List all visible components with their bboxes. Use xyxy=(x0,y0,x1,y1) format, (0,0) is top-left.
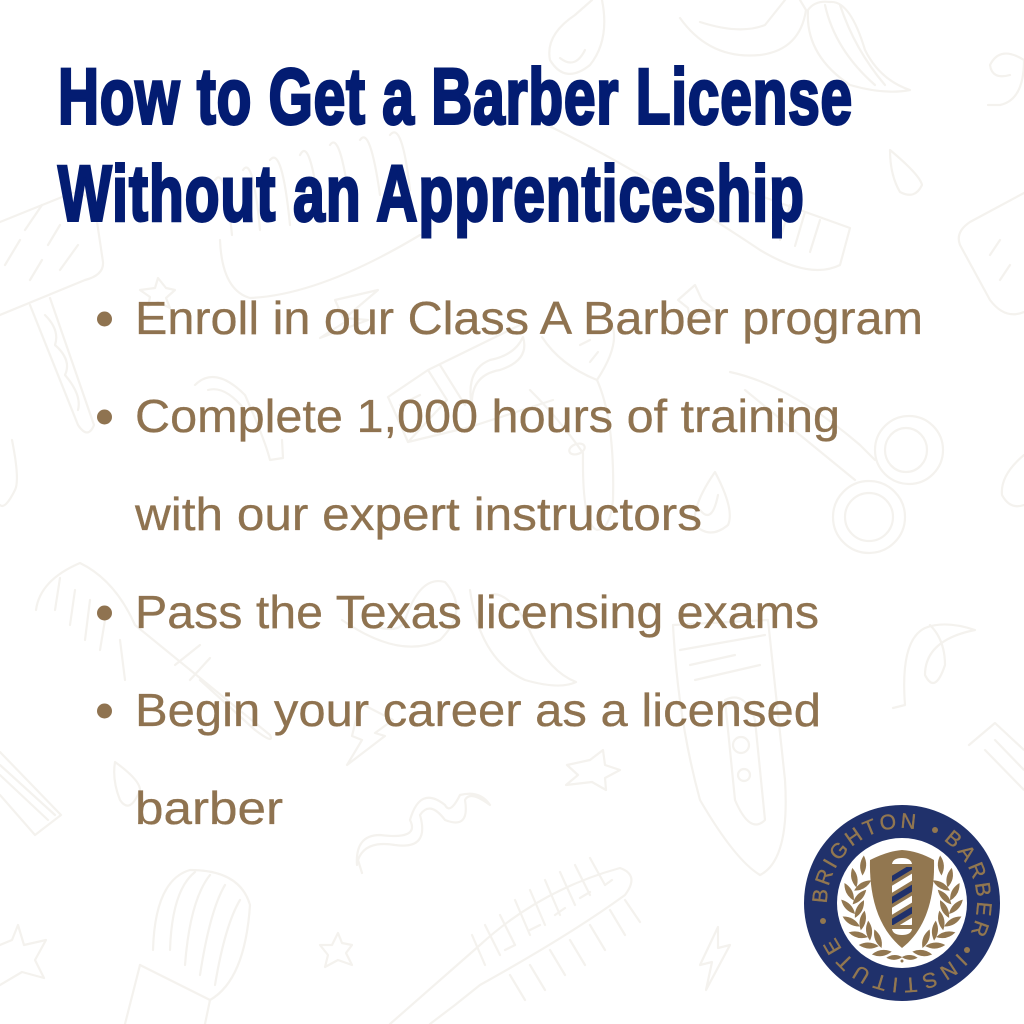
bullet 2 xyxy=(97,390,840,540)
bullet 2: with our expert instructors xyxy=(134,488,702,540)
logo badge: Brighton Barber Institute xyxy=(804,805,1000,1001)
toothbrush, top right xyxy=(547,125,850,270)
drop and curl right xyxy=(890,150,922,195)
bullet 4 xyxy=(97,684,821,834)
shield with barber pole xyxy=(870,850,934,948)
star and bolts upper centre xyxy=(140,278,175,308)
scissors xyxy=(730,372,875,480)
swoosh top right xyxy=(680,0,806,56)
logo ring text: BRIGHTON xyxy=(812,813,916,902)
logo ring text xyxy=(812,813,992,993)
title: Without an Apprenticeship xyxy=(58,149,804,238)
title: How to Get a Barber License xyxy=(58,52,852,141)
razor, left xyxy=(0,193,103,315)
squiggle xyxy=(357,794,490,873)
drop top xyxy=(549,0,604,74)
logo ring text: BARBER xyxy=(944,830,992,936)
curl, right xyxy=(893,624,975,708)
laurel wreath xyxy=(839,855,965,962)
drop left and right edge xyxy=(0,440,17,506)
bullet 3: Pass the Texas licensing exams xyxy=(135,586,819,638)
plate right xyxy=(959,193,1024,314)
bolts xyxy=(347,703,393,765)
title xyxy=(58,52,852,238)
clipper xyxy=(673,620,786,875)
bullet list xyxy=(97,292,923,834)
hair brush xyxy=(390,868,631,1024)
stars xyxy=(566,750,620,790)
swoosh lower centre xyxy=(342,581,456,647)
bullet 4: barber xyxy=(135,782,283,834)
comb right xyxy=(969,723,1024,790)
shaving brush xyxy=(140,870,250,1000)
hair tool, centre xyxy=(195,377,283,460)
bullet 2: Complete 1,000 hours of training xyxy=(135,390,840,442)
drop centre xyxy=(695,472,730,532)
comb far left xyxy=(0,752,61,835)
comb, lower left xyxy=(36,563,271,739)
bullet 1: Enroll in our Class A Barber program xyxy=(135,292,923,344)
comb, top centre xyxy=(220,235,420,298)
bullet 4: Begin your career as a licensed xyxy=(135,684,821,736)
leaf small xyxy=(114,762,140,806)
logo ring text: INSTITUTE xyxy=(823,938,968,993)
barber pole xyxy=(892,858,912,935)
